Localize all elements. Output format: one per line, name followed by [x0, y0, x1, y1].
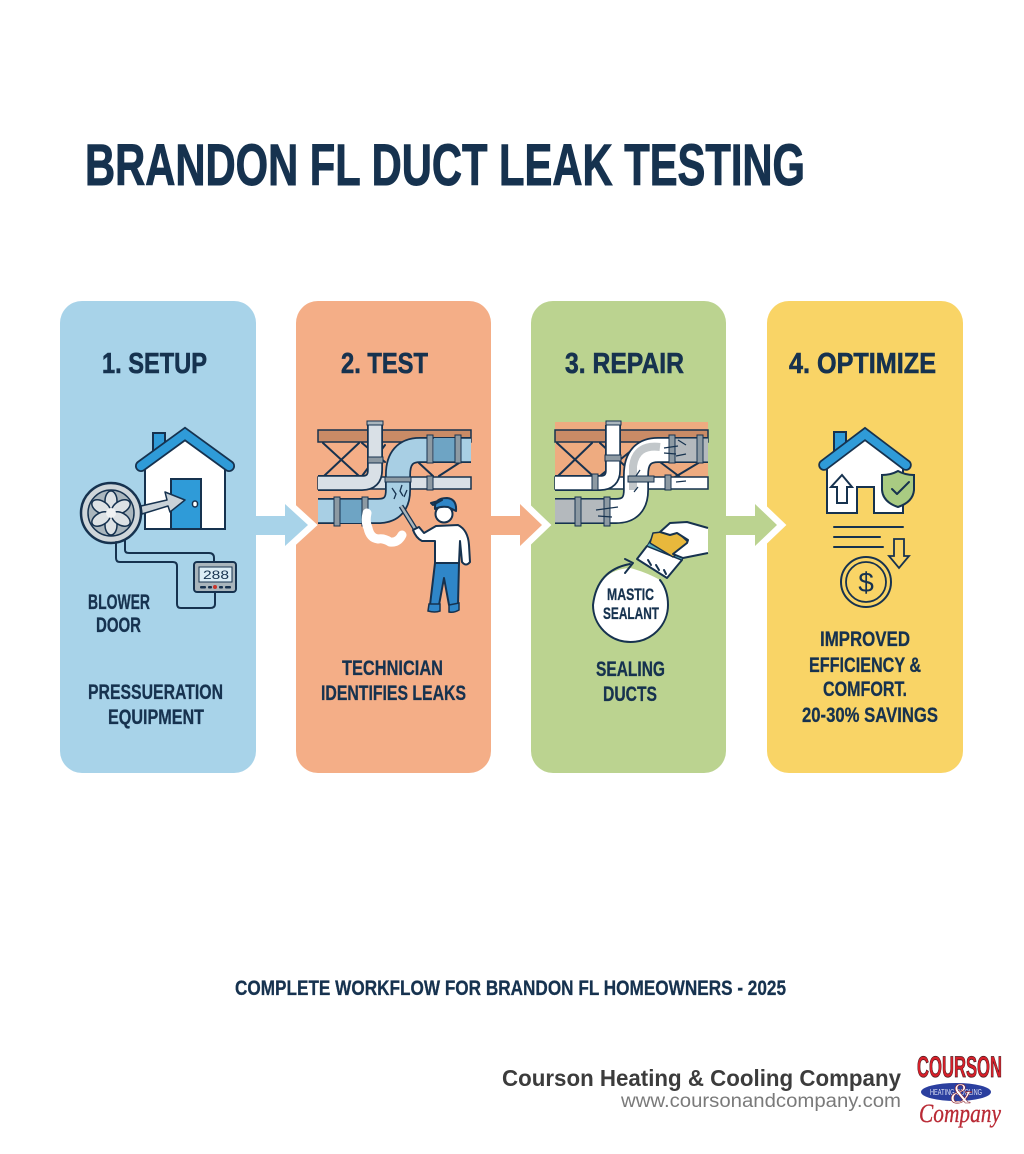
heading: 1. setup: 1. SETUP: [102, 348, 207, 380]
icon: sealed ducts: [555, 421, 708, 526]
heading: 3. repair: 3. REPAIR: [565, 348, 684, 380]
text: pressuration equipment: PRESSUERATION: [88, 681, 223, 704]
callout: mastic sealant: SEALANT: [603, 604, 659, 623]
footer caption: COMPLETE WORKFLOW FOR BRANDON FL HOMEOWNERS - 2025: [235, 977, 786, 1000]
callout: mastic sealant: [593, 559, 668, 642]
icon: dollar coin: [841, 557, 891, 607]
text: improved efficiency: 20-30% SAVINGS: [802, 704, 938, 727]
company name: Courson Heating & Cooling Company: [502, 1065, 901, 1091]
logo: courson company: HEATING COOLING: [930, 1088, 982, 1097]
icon: up arrow: [831, 475, 852, 503]
icon: pressure gauge: 288: [203, 568, 229, 582]
text: sealing ducts: [596, 658, 665, 706]
company website: www.coursonandcompany.com: [620, 1091, 901, 1112]
icon: house with blower door: [81, 433, 236, 608]
text: improved efficiency: [802, 628, 938, 727]
icon: leaking ducts: [318, 421, 471, 542]
icon: smoke: [366, 513, 402, 542]
icon: technician: [401, 498, 470, 612]
arrow: setup to test: [256, 504, 308, 546]
icon: brush and hand: [637, 522, 708, 578]
panel: repair: [531, 301, 726, 773]
icon: pressure gauge: [194, 562, 236, 592]
logo: courson company: Company: [919, 1099, 1001, 1128]
text: improved efficiency: IMPROVED: [820, 628, 910, 651]
text: improved efficiency: EFFICIENCY &: [809, 654, 921, 677]
icon: shield check: [882, 471, 914, 507]
text: technician identifies leaks: TECHNICIAN: [342, 657, 443, 680]
icon: text lines: [834, 527, 903, 547]
panel: setup: [60, 301, 256, 773]
callout: mastic sealant: MASTIC: [607, 585, 654, 604]
text: sealing ducts: DUCTS: [603, 683, 657, 706]
text: pressuration equipment: EQUIPMENT: [108, 706, 204, 729]
icon: dollar coin: $: [858, 567, 874, 598]
text: improved efficiency: COMFORT.: [823, 678, 907, 701]
text: blower door: BLOWER: [88, 591, 150, 614]
icon: down arrow: [889, 539, 909, 568]
heading: 4. optimize: 4. OPTIMIZE: [789, 348, 936, 380]
logo: courson company: &: [950, 1079, 972, 1110]
text: blower door: DOOR: [96, 614, 141, 637]
text: pressuration equipment: [88, 681, 223, 729]
logo: courson company: [917, 1051, 1002, 1128]
panel: optimize: [767, 301, 963, 773]
icon: efficient house: [824, 432, 914, 513]
text: sealing ducts: SEALING: [596, 658, 665, 681]
heading: 2. test: 2. TEST: [341, 348, 428, 380]
panel: test: [296, 301, 491, 773]
text: blower door: [88, 591, 150, 637]
icon: airflow arrow: [141, 492, 185, 514]
arrow: repair to optimize: [726, 504, 777, 546]
icon: blower fan: [81, 483, 141, 543]
text: technician identifies leaks: [321, 657, 466, 705]
text: technician identifies leaks: IDENTIFIES LEAKS: [321, 682, 466, 705]
arrow: test to repair: [491, 504, 542, 546]
